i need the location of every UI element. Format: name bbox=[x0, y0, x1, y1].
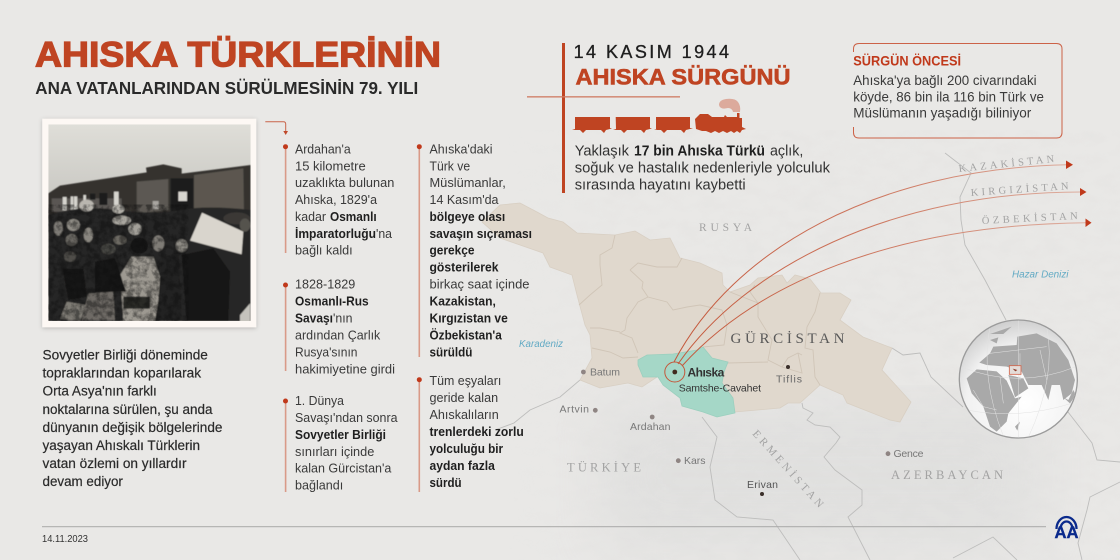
date: 14.11.2023 bbox=[42, 534, 88, 545]
label: Ermenistan: ERMENİSTAN bbox=[750, 428, 826, 510]
intro paragraph: Sovyetler Birliği döneminde bbox=[42, 348, 208, 362]
item: Osmanlı-Rus Savaşı bbox=[283, 277, 395, 376]
item: Ardahan: Ardahan'a bbox=[295, 141, 351, 156]
arrow: to Kazakistan bbox=[674, 160, 1073, 362]
item: sürgün kararı: 14 Kasım'da bbox=[430, 192, 499, 207]
item: sürgün kararı: sürüldü bbox=[430, 344, 472, 360]
label: Gürcistan: GÜRCİSTAN bbox=[730, 330, 845, 347]
item: sürgün kararı bbox=[417, 141, 532, 360]
item: 1. Dünya Savaşı: kalan Gürcistan'a bbox=[295, 460, 392, 476]
intro paragraph: devam ediyor bbox=[42, 474, 123, 489]
heading: AHISKA SÜRGÜNÜ bbox=[576, 64, 790, 89]
city: Kars: Kars bbox=[684, 455, 706, 467]
item: 1. Dünya Savaşı: bağlandı bbox=[295, 478, 343, 492]
item: Ardahan: Ahıska, 1829'a bbox=[295, 192, 378, 207]
timeline column 1 bbox=[283, 141, 398, 493]
text: casualties: soğuk ve hastalık nedenleriyle yolculuk bbox=[575, 160, 830, 176]
item: Ardahan: Osmanlı bbox=[330, 209, 377, 224]
text: Ahıska'ya bağlı 200 civarındaki bbox=[853, 73, 1037, 88]
footer rule bbox=[42, 526, 1046, 527]
text: casualties: 17 bin Ahıska Türkü bbox=[634, 142, 765, 160]
label: Kırgızistan: KIRGIZİSTAN bbox=[970, 180, 1069, 199]
item: sürgün kararı: Kırgızistan ve bbox=[430, 310, 508, 326]
item: Osmanlı-Rus Savaşı: 1828-1829 bbox=[295, 277, 355, 292]
city: Erivan: Erivan bbox=[747, 479, 778, 491]
label: Özbekistan: ÖZBEKİSTAN bbox=[982, 210, 1078, 227]
item: sürgün kararı: gerekçe bbox=[430, 243, 474, 258]
item: yolculuk: Tüm eşyaları bbox=[430, 373, 501, 388]
city: Artvin: Artvin bbox=[560, 404, 589, 416]
item: sürgün kararı: Kazakistan, bbox=[430, 294, 496, 308]
subtitle: ANA VATANLARINDAN SÜRÜLMESİNİN 79. YILI bbox=[35, 78, 418, 98]
item: yolculuk: sürdü bbox=[430, 475, 462, 490]
marker: Ahıska bbox=[665, 362, 685, 382]
item: sürgün kararı: Ahıska'daki bbox=[430, 141, 493, 156]
panel: Sürgün öncesi bbox=[853, 44, 1062, 138]
item: Ardahan: 'na bbox=[376, 226, 393, 241]
heading: SÜRGÜN ÖNCESİ bbox=[853, 53, 961, 69]
intro paragraph: dünyanın değişik bölgelerinde bbox=[42, 420, 223, 435]
item: 1. Dünya Savaşı bbox=[283, 393, 398, 492]
city: Tiflis: Tiflis bbox=[776, 374, 802, 386]
text: casualties: sırasında hayatını kaybetti bbox=[575, 176, 746, 193]
item: yolculuk: yolculuğu bir bbox=[430, 441, 503, 456]
text: köyde, 86 bin ila 116 bin Türk ve bbox=[853, 89, 1044, 104]
item: yolculuk: aydan fazla bbox=[430, 458, 496, 473]
arrow: to Özbekistan bbox=[682, 218, 1092, 366]
city: Gence: Gence bbox=[894, 448, 924, 460]
item: sürgün kararı: Türk ve bbox=[430, 158, 470, 173]
item: sürgün kararı: bölgeye olası bbox=[430, 209, 505, 224]
title: AHISKA TÜRKLERİNİN bbox=[35, 35, 441, 75]
item: Ardahan: 15 kilometre bbox=[295, 158, 366, 173]
connector arrow bbox=[265, 122, 288, 135]
item: yolculuk: trenlerdeki zorlu bbox=[430, 424, 524, 439]
logo: Anadolu Ajansı: AA bbox=[1054, 523, 1078, 542]
arrow: to Kırgızistan bbox=[678, 188, 1086, 364]
text: casualties: Yaklaşık bbox=[575, 142, 629, 160]
item: sürgün kararı: Müslümanlar, bbox=[430, 175, 506, 190]
intro paragraph: topraklarından koparılarak bbox=[42, 366, 201, 380]
text: casualties: açlık, bbox=[770, 142, 803, 160]
panel: 14 Kasım 1944 bbox=[527, 42, 830, 193]
text: casualties bbox=[575, 142, 830, 193]
label: Hazar Denizi: Hazar Denizi bbox=[1012, 270, 1069, 280]
photo: deportation train bbox=[42, 119, 256, 327]
intro paragraph: vatan özlemi on yıllardır bbox=[42, 456, 187, 471]
label: Ahıska: Ahıska bbox=[688, 366, 725, 380]
item: Ardahan: uzaklıkta bulunan bbox=[295, 175, 394, 190]
timeline column 2 bbox=[417, 141, 532, 492]
city: Ardahan: Ardahan bbox=[630, 421, 671, 433]
city: Ardahan bbox=[630, 415, 671, 433]
city: Tiflis bbox=[776, 365, 802, 386]
item: 1. Dünya Savaşı: sınırları içinde bbox=[295, 444, 374, 459]
date heading: 14 KASIM 1944 bbox=[574, 42, 729, 62]
text bbox=[853, 73, 1044, 120]
text: Müslümanın yaşadığı biliniyor bbox=[853, 105, 1032, 120]
item: sürgün kararı: birkaç saat içinde bbox=[430, 277, 530, 292]
item: yolculuk: geride kalan bbox=[430, 390, 498, 405]
item: Osmanlı-Rus Savaşı: ardından Çarlık bbox=[295, 328, 381, 343]
label: Azerbaycan: AZERBAYCAN bbox=[891, 468, 1003, 482]
label: Rusya: RUSYA bbox=[699, 222, 753, 234]
item: 1. Dünya Savaşı: Savaşı'ndan sonra bbox=[295, 410, 398, 425]
item: yolculuk: Ahıskalıların bbox=[430, 407, 499, 422]
item: Osmanlı-Rus Savaşı: 'nın bbox=[333, 311, 352, 326]
intro paragraph: noktalarına sürülen, şu anda bbox=[42, 402, 213, 417]
locator box bbox=[1009, 366, 1021, 374]
item: 1. Dünya Savaşı: Sovyetler Birliği bbox=[295, 427, 386, 442]
item: yolculuk bbox=[417, 373, 524, 492]
country: Georgia bbox=[482, 203, 911, 422]
icon: train bbox=[572, 99, 746, 133]
migration arrows bbox=[674, 160, 1092, 366]
item: Ardahan bbox=[283, 141, 394, 258]
intro paragraph: yaşayan Ahıskalı Türklerin bbox=[42, 438, 200, 453]
item: Osmanlı-Rus Savaşı: hakimiyetine girdi bbox=[295, 361, 395, 376]
item: Ardahan: İmparatorluğu bbox=[295, 226, 376, 241]
globe locator bbox=[959, 320, 1077, 438]
item: Ardahan: bağlı kaldı bbox=[295, 243, 353, 258]
map bbox=[482, 130, 1120, 560]
label: Kazakistan: KAZAKİSTAN bbox=[958, 153, 1055, 175]
item: Osmanlı-Rus Savaşı: Osmanlı-Rus bbox=[295, 294, 369, 309]
city: Batum: Batum bbox=[590, 366, 620, 378]
region: Samtshe-Cavahet bbox=[638, 347, 735, 417]
intro paragraph bbox=[42, 348, 223, 489]
label: Karadeniz: Karadeniz bbox=[519, 339, 563, 350]
item: Osmanlı-Rus Savaşı: Rusya'sının bbox=[295, 345, 358, 360]
item: sürgün kararı: gösterilerek bbox=[430, 260, 499, 274]
label: Samtshe-Cavahet: Samtshe-Cavahet bbox=[679, 383, 761, 395]
item: 1. Dünya Savaşı: 1. Dünya bbox=[295, 393, 345, 408]
label: Türkiye: TÜRKİYE bbox=[567, 460, 641, 474]
item: sürgün kararı: Özbekistan'a bbox=[430, 328, 502, 342]
intro paragraph: Orta Asya'nın farklı bbox=[42, 384, 157, 399]
item: sürgün kararı: savaşın sıçraması bbox=[430, 226, 532, 241]
item: Ardahan: kadar bbox=[295, 209, 327, 224]
item: Osmanlı-Rus Savaşı: Savaşı bbox=[295, 311, 333, 326]
